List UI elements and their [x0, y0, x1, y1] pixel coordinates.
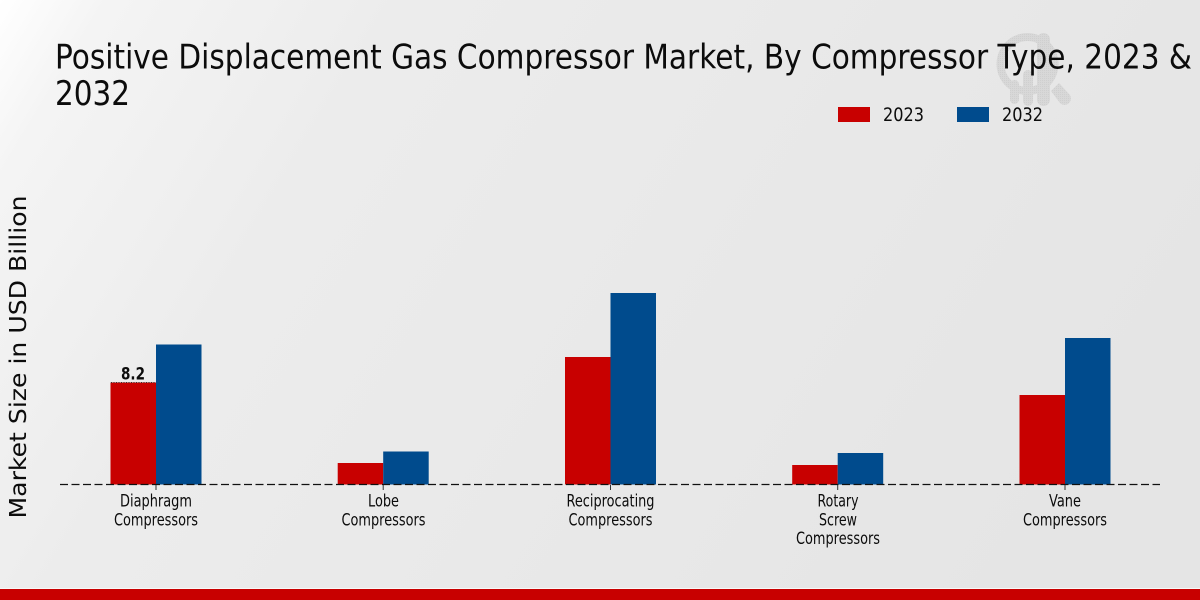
category label: Reciprocating Compressors: [566, 492, 654, 530]
category label: Reciprocating Compressors: Reciprocating: [566, 492, 654, 510]
title: 2032: [55, 74, 130, 114]
bar chart: [60, 293, 1160, 490]
category label: Vane Compressors: [1023, 492, 1107, 530]
category label: Rotary Screw Compressors: Screw: [819, 510, 857, 530]
legend item: 2032: 2032: [1002, 104, 1043, 126]
data label: 8.2: 8.2: [121, 364, 145, 384]
category label: Vane Compressors: Compressors: [1023, 510, 1107, 530]
category label: Diaphragm Compressors: Compressors: [114, 510, 198, 530]
category label: Diaphragm Compressors: Diaphragm: [120, 492, 192, 510]
legend item: 2023: 2023: [883, 104, 924, 126]
legend item: 2032: [957, 104, 1043, 126]
category label: Vane Compressors: Vane: [1049, 492, 1081, 510]
category label: Lobe Compressors: [342, 492, 426, 530]
x axis baseline: [60, 484, 1160, 486]
legend item: 2023: [838, 104, 924, 126]
bars: Vane Compressors: [1020, 338, 1110, 484]
title: [55, 38, 1192, 114]
bars: Diaphragm Compressors: [110, 344, 202, 484]
x axis tick marks: [156, 485, 1065, 490]
bars: Lobe Compressors: [338, 452, 429, 484]
icon: watermark magnifier logo: [997, 33, 1071, 106]
bars: Rotary Screw Compressors: [792, 453, 883, 484]
footer bar: [0, 588, 1200, 600]
category label: Lobe Compressors: Compressors: [342, 510, 426, 530]
category label: Lobe Compressors: Lobe: [368, 492, 399, 510]
category label: Diaphragm Compressors: [114, 492, 198, 530]
category label: Reciprocating Compressors: Compressors: [568, 510, 652, 530]
y axis label: Market Size in USD Billion: [6, 196, 32, 518]
legend: [838, 104, 1043, 126]
category label: Rotary Screw Compressors: Rotary: [818, 492, 859, 510]
category label: Rotary Screw Compressors: Compressors: [796, 529, 880, 548]
category label: Rotary Screw Compressors: [796, 492, 880, 548]
bars: Reciprocating Compressors: [565, 293, 656, 484]
